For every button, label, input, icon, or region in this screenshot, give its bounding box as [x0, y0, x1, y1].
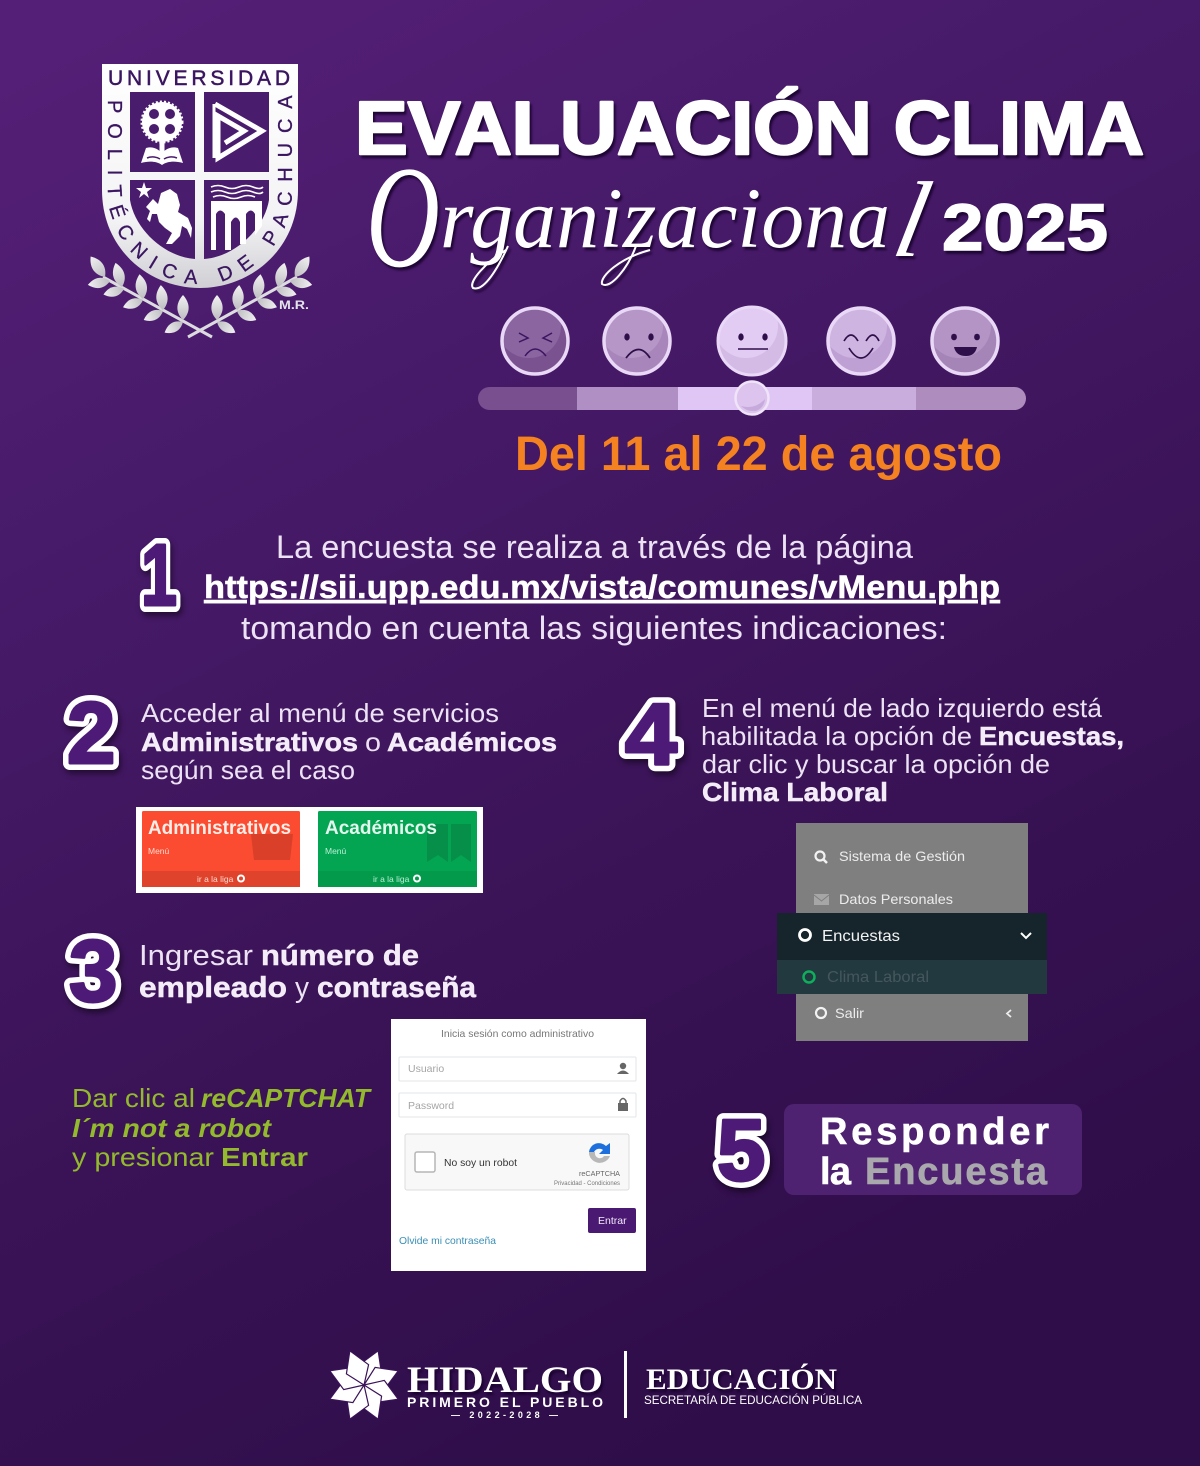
button: Entrar — [588, 1208, 636, 1233]
menu item: Salir: Salir — [835, 1005, 864, 1021]
step 2 text: según sea el caso — [141, 755, 355, 785]
step 3 text: contraseña — [317, 972, 477, 1004]
step 5 number: 5 — [717, 1102, 765, 1199]
face: very happy — [930, 306, 1000, 376]
menu item: Clima Laboral — [777, 960, 1047, 994]
title: Organizacional 2025: l — [885, 160, 940, 280]
rating scale faces — [500, 306, 1000, 376]
login form screenshot: Inicia sesión como administrativo — [441, 1028, 594, 1040]
field: Usuario — [399, 1057, 636, 1081]
reCAPTCHA box: No soy un robot — [444, 1157, 517, 1169]
logo: Universidad Politécnica de Pachuca crest: M.R. — [279, 298, 309, 312]
face: unhappy — [602, 306, 672, 376]
reCAPTCHA instructions: I´m not a robot — [72, 1113, 272, 1143]
logo: Universidad Politécnica de Pachuca crest: UNIVERSIDAD — [108, 67, 290, 90]
step 1 number: 1 — [141, 527, 177, 624]
reCAPTCHA box — [405, 1134, 629, 1190]
icon: Hidalgo star — [325, 1346, 403, 1424]
step 2 text: Administrativos — [141, 727, 358, 757]
card: Académicos: Académicos — [325, 818, 437, 839]
step 3 text: número de — [261, 940, 419, 972]
reCAPTCHA instructions: y presionar — [72, 1142, 214, 1172]
call to action: Responder la Encuesta — [784, 1104, 1082, 1195]
step 1 text — [204, 529, 1000, 646]
card: Académicos: Menú — [325, 846, 347, 856]
card: Administrativos: Menú — [148, 846, 170, 856]
wordmark: Educación — [644, 1363, 862, 1407]
step 3 text: y — [295, 972, 309, 1004]
menu item: Clima Laboral: Clima Laboral — [827, 969, 929, 986]
wordmark: Educación: EDUCACIÓN — [646, 1363, 837, 1396]
step 2 text — [141, 698, 557, 785]
reCAPTCHA instructions: Dar clic al — [72, 1083, 195, 1113]
step 4 text: dar clic y buscar la opción de — [702, 749, 1050, 779]
field: Password — [399, 1093, 636, 1117]
step 1 text: https://sii.upp.edu.mx/vista/comunes/vMenu.php — [204, 569, 1000, 605]
title: Organizacional 2025: 2025 — [942, 190, 1108, 264]
step 1 number: 1 — [141, 527, 177, 624]
wordmark: Hidalgo: HIDALGO — [407, 1360, 603, 1401]
face: very unhappy — [500, 306, 570, 376]
card: Académicos: ir a la liga — [373, 874, 410, 884]
login form screenshot: Olvide mi contraseña — [399, 1235, 496, 1247]
wordmark: Educación: SECRETARÍA DE EDUCACIÓN PÚBLICA — [644, 1392, 862, 1407]
card: Académicos — [318, 811, 477, 887]
date: Del 11 al 22 de agosto: Del 11 al 22 de agosto — [515, 428, 1002, 481]
step 4 text: En el menú de lado izquierdo está — [702, 693, 1103, 723]
step 3 number: 3 — [69, 923, 117, 1020]
reCAPTCHA instructions — [72, 1083, 372, 1172]
reCAPTCHA box: reCAPTCHA — [579, 1169, 620, 1178]
step 2 text: Acceder al menú de servicios — [141, 698, 499, 728]
card: Administrativos: ir a la liga — [197, 874, 234, 884]
step 2 text: Académicos — [387, 727, 557, 757]
menu item: Salir — [816, 1005, 1011, 1021]
logo: Universidad Politécnica de Pachuca crest — [88, 64, 312, 338]
step 4 text — [701, 693, 1124, 807]
menu item: Encuestas — [777, 913, 1047, 960]
sidebar menu screenshot — [777, 823, 1047, 1041]
step 3 text: empleado — [139, 972, 287, 1004]
face: happy — [826, 306, 896, 376]
menu item: Sistema de Gestión: Sistema de Gestión — [839, 848, 965, 864]
step 1 text: tomando en cuenta las siguientes indicaciones: — [241, 610, 947, 646]
step 2 text: o — [365, 727, 381, 757]
title: Organizacional 2025: rganizaciona — [440, 170, 890, 266]
step 4 text: habilitada la opción de — [701, 721, 972, 751]
card: Administrativos: Administrativos — [148, 818, 291, 839]
reCAPTCHA instructions: reCAPTCHAT — [201, 1083, 372, 1113]
step 5 number: 5 — [717, 1102, 765, 1199]
step 3 text — [139, 940, 477, 1004]
call to action: Responder la Encuesta: la — [820, 1151, 852, 1193]
menu item: Datos Personales: Datos Personales — [839, 891, 953, 907]
step 4 number: 4 — [625, 686, 677, 783]
menu item: Encuestas: Encuestas — [822, 928, 900, 945]
step 4 text: Clima Laboral — [702, 777, 888, 807]
step 2 number: 2 — [67, 685, 115, 782]
logo: Universidad Politécnica de Pachuca crest: POLITÉCNICA DE PACHUCA — [108, 95, 292, 284]
step 2 number: 2 — [67, 685, 115, 782]
wordmark: Hidalgo — [407, 1360, 603, 1420]
login form screenshot — [391, 1019, 646, 1271]
title: Organizacional 2025 — [366, 136, 1108, 298]
button: Entrar: Entrar — [598, 1215, 627, 1227]
wordmark: Hidalgo: — 2022-2028 — — [451, 1410, 558, 1420]
wordmark: Hidalgo: PRIMERO EL PUEBLO — [407, 1394, 603, 1410]
step 4 number: 4 — [625, 686, 677, 783]
title: Organizacional 2025: O — [366, 136, 440, 298]
title: Evaluación Clima: EVALUACIÓN CLIMA — [355, 86, 1144, 170]
face: neutral — [716, 306, 788, 376]
field: Usuario: Usuario — [408, 1063, 444, 1075]
step 3 text: Ingresar — [139, 940, 253, 972]
reCAPTCHA instructions: Entrar — [221, 1142, 308, 1172]
call to action: Responder la Encuesta: Encuesta — [865, 1151, 1048, 1193]
step 4 text: Encuestas, — [979, 721, 1124, 751]
footer logos — [325, 1346, 862, 1424]
rating slider bar — [478, 382, 1026, 414]
call to action: Responder la Encuesta: Responder — [820, 1111, 1049, 1153]
reCAPTCHA box: Privacidad - Condiciones — [554, 1181, 620, 1187]
step 1 text: La encuesta se realiza a través de la página — [276, 529, 913, 565]
step 3 number: 3 — [69, 923, 117, 1020]
menu cards screenshot — [136, 807, 483, 893]
field: Password: Password — [408, 1100, 454, 1112]
card: Administrativos — [142, 811, 300, 887]
